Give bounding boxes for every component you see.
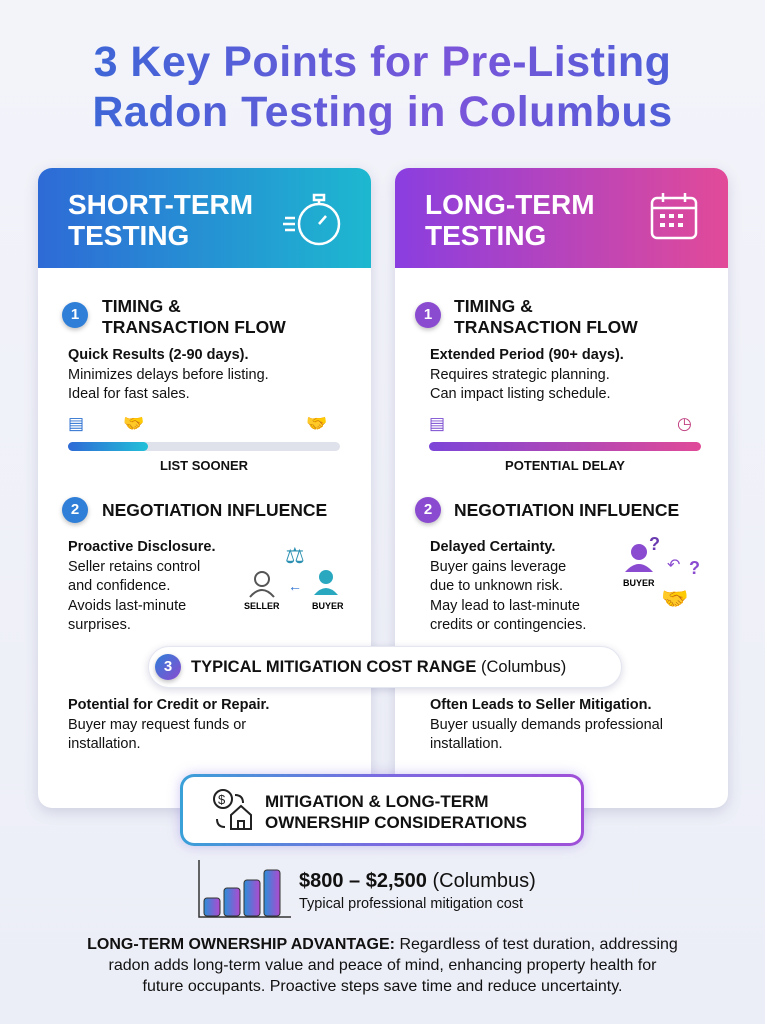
footer paragraph <box>87 936 678 995</box>
section 2: Proactive Disclosure. <box>68 539 216 555</box>
section 2 <box>412 496 700 633</box>
icon: seller buyer scale <box>244 543 344 611</box>
section 3 right text <box>430 697 663 752</box>
icon: buyer question: BUYER <box>623 578 655 588</box>
section 2: Delayed Certainty. <box>430 539 555 555</box>
price text: $800 – $2,500 (Columbus) <box>299 870 536 892</box>
footer paragraph: future occupants. Proactive steps save time and reduce uncertainty. <box>143 978 622 995</box>
icon: money house <box>213 789 252 830</box>
icon: calendar <box>650 193 698 240</box>
price text <box>299 870 536 912</box>
section 2: and confidence. <box>68 578 170 594</box>
panel: short-term <box>38 168 371 808</box>
section 3 left text: Potential for Credit or Repair. <box>68 697 269 713</box>
icon: seller buyer scale: ← <box>288 578 302 594</box>
icon: buyer question: ? <box>689 558 700 578</box>
icon: buyer question: ↶ <box>667 557 680 574</box>
section 2: credits or contingencies. <box>430 617 586 633</box>
section 1: 1 <box>424 306 432 323</box>
section 1 <box>60 296 340 473</box>
section 2: May lead to last-minute <box>430 598 580 614</box>
section 1: Ideal for fast sales. <box>68 386 190 402</box>
section 1: Can impact listing schedule. <box>430 386 611 402</box>
icon: seller buyer scale: BUYER <box>312 601 344 611</box>
section 1: Requires strategic planning. <box>430 366 610 382</box>
section 1: ◷ <box>677 414 692 433</box>
icon: seller buyer scale: SELLER <box>244 601 280 611</box>
chart: bar icon <box>198 860 291 918</box>
progress bar <box>68 442 340 451</box>
section 1: TRANSACTION FLOW <box>102 317 286 337</box>
icon: buyer question: ? <box>649 534 660 554</box>
header: long-term: LONG-TERM <box>425 189 595 220</box>
section 1: TIMING & <box>454 296 533 316</box>
title <box>0 37 765 137</box>
box: mitigation & ownership: OWNERSHIP CONSIDERATIONS <box>265 813 527 832</box>
section 3 left text: Buyer may request funds or <box>68 716 246 732</box>
pill: mitigation cost: 3 <box>164 658 172 675</box>
section 3 left text: installation. <box>68 736 141 752</box>
section 3 right text: Often Leads to Seller Mitigation. <box>430 697 652 713</box>
section 3 left text <box>68 697 269 752</box>
section 2 <box>60 496 344 633</box>
section 1: Minimizes delays before listing. <box>68 366 269 382</box>
icon: seller buyer scale: ⚖ <box>285 543 305 568</box>
section 2: Avoids last-minute <box>68 598 186 614</box>
panel: long-term <box>395 168 728 808</box>
section 2: due to unknown risk. <box>430 578 563 594</box>
section 1: Extended Period (90+ days). <box>430 347 624 363</box>
section 1 <box>412 296 701 473</box>
section 1: ▤ <box>429 414 445 433</box>
section 2: Seller retains control <box>68 558 200 574</box>
price text: Typical professional mitigation cost <box>299 896 523 912</box>
icon: buyer question: 🤝 <box>661 586 688 611</box>
header: long-term <box>395 168 728 268</box>
header: short-term: TESTING <box>68 220 189 251</box>
icon: money house: $ <box>218 792 226 807</box>
pill: mitigation cost: TYPICAL MITIGATION COST RANGE (Columbus) <box>191 658 566 676</box>
section 2: 2 <box>424 501 432 518</box>
icon: stopwatch <box>283 194 340 246</box>
section 1: Quick Results (2-90 days). <box>68 347 249 363</box>
header: short-term <box>38 168 371 268</box>
section 2: 2 <box>71 501 79 518</box>
title: Radon Testing in Columbus <box>92 88 673 136</box>
pill: mitigation cost <box>148 646 622 688</box>
section 3 right text: installation. <box>430 736 503 752</box>
box: mitigation & ownership: MITIGATION & LONG-TERM <box>265 792 488 811</box>
section 2: surprises. <box>68 617 131 633</box>
section 1: 1 <box>71 306 79 323</box>
section 1: TRANSACTION FLOW <box>454 317 638 337</box>
section 3 right text: Buyer usually demands professional <box>430 716 663 732</box>
section 1: TIMING & <box>102 296 181 316</box>
box: mitigation & ownership <box>180 774 584 846</box>
section 2: NEGOTIATION INFLUENCE <box>454 500 679 520</box>
section 1: POTENTIAL DELAY <box>505 458 625 473</box>
header: long-term: TESTING <box>425 220 546 251</box>
section 2: Buyer gains leverage <box>430 558 566 574</box>
footer paragraph: radon adds long-term value and peace of mind, enhancing property health for <box>109 957 656 974</box>
section 1: LIST SOONER <box>160 458 248 473</box>
icons: listing & handshakes: 🤝 <box>306 414 327 433</box>
icon: buyer question <box>623 534 700 611</box>
section 2: NEGOTIATION INFLUENCE <box>102 500 327 520</box>
progress bar <box>429 442 701 451</box>
header: short-term: SHORT-TERM <box>68 189 253 220</box>
icons: listing & handshakes: 🤝 <box>123 414 144 433</box>
icons: listing & handshakes <box>68 414 327 433</box>
footer paragraph: LONG-TERM OWNERSHIP ADVANTAGE: Regardless of test duration, addressing <box>87 936 678 953</box>
icons: listing & handshakes: ▤ <box>68 414 84 433</box>
title: 3 Key Points for Pre-Listing <box>94 38 671 86</box>
